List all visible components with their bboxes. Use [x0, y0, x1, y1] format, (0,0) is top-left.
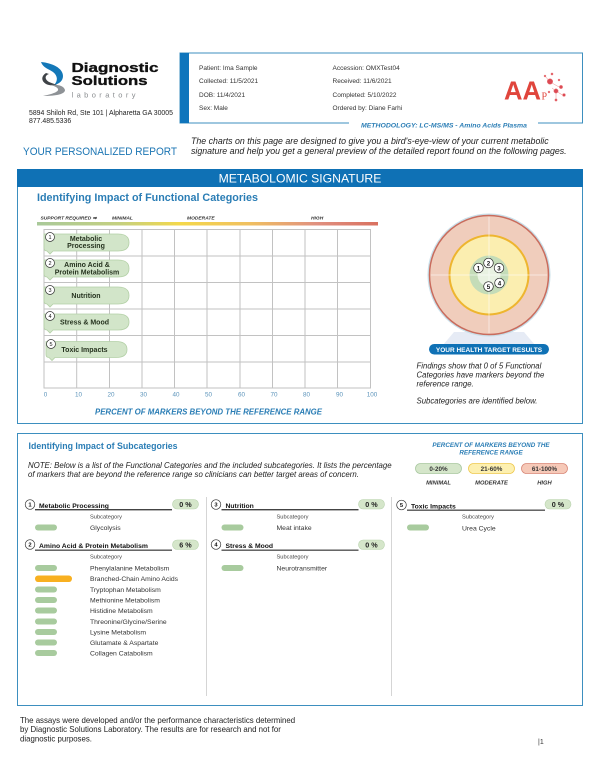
section: toxic impacts: Toxic Impacts [411, 504, 456, 510]
legend: moderate [468, 464, 514, 486]
category: amino acid and protein metabolism: Protein Metabolism [55, 270, 119, 276]
severity scale: HIGH [311, 216, 324, 222]
section: nutrition: 0 % [365, 500, 378, 509]
icon: AAP logo [504, 73, 566, 106]
severity scale: MODERATE [187, 216, 215, 222]
patient details: Sex: Male [199, 105, 228, 112]
findings text: Findings show that 0 of 5 Functional [416, 362, 542, 370]
note text: NOTE: Below is a list of the Functional Categories and the included subcategories. It lists the percentage [28, 461, 392, 470]
marker 2: 2 [487, 260, 491, 267]
section: amino acid and protein metabolism: 6 % [179, 540, 192, 550]
legend: high: 61-100% [532, 466, 557, 473]
section: metabolic processing: Glycolysis [90, 525, 121, 532]
icon: logo swirl [41, 62, 65, 96]
section: nutrition: 3 [214, 503, 218, 509]
axis labels: 0 [44, 392, 48, 398]
section: toxic impacts: Subcategory [462, 514, 494, 520]
heading bar: metabolomic signature [17, 169, 583, 187]
address: 877.485.5336 [29, 118, 71, 125]
section: stress and mood: 4 [214, 543, 218, 549]
accession details: Received: 11/6/2021 [332, 78, 392, 85]
panel: subcategories [18, 434, 582, 706]
target chart [428, 214, 550, 345]
bar chart: functional categories [44, 230, 378, 416]
axis labels: 80 [303, 392, 310, 398]
category: stress and mood: Stress & Mood [60, 320, 109, 326]
label: your health target results: YOUR HEALTH TARGET RESULTS [436, 347, 543, 354]
category: metabolic processing: Metabolic [70, 236, 102, 243]
severity scale [37, 216, 378, 226]
section: nutrition: Subcategory [276, 514, 309, 520]
marker 3: 3 [497, 265, 501, 272]
section: amino acid and protein metabolism: 2 [28, 543, 32, 549]
legend: high [522, 464, 568, 486]
section: metabolic processing [25, 500, 199, 532]
section: amino acid and protein metabolism: Collagen Catabolism [90, 650, 153, 658]
panel: metabolomic signature [17, 169, 583, 424]
patient details: DOB: 11/4/2021 [199, 92, 246, 99]
patient details: Patient: Ima Sample [199, 65, 258, 72]
findings text: Categories have markers beyond the [416, 370, 545, 380]
patient details: Collected: 11/5/2021 [199, 78, 259, 85]
category: metabolic processing: 1 [48, 235, 52, 241]
category: toxic impacts [46, 340, 127, 360]
category: nutrition [44, 286, 129, 307]
label: your health target results [429, 344, 549, 354]
heading bar: metabolomic signature: METABOLOMIC SIGNATURE [219, 172, 381, 186]
section: amino acid and protein metabolism: Lysine Metabolism [90, 630, 146, 636]
category: toxic impacts: 5 [49, 342, 53, 348]
subcategory rows [35, 565, 72, 656]
section: stress and mood [211, 540, 384, 572]
axis title: PERCENT OF MARKERS BEYOND THE REFERENCE RANGE [95, 408, 323, 416]
legend title: REFERENCE RANGE [459, 450, 523, 456]
moderate ring [450, 236, 528, 314]
legend [416, 442, 568, 486]
disclaimer: diagnostic purposes. [20, 734, 92, 744]
axis labels: 40 [172, 392, 180, 398]
section: amino acid and protein metabolism: Histidine Metabolism [90, 608, 153, 615]
findings text: Subcategories are identified below. [416, 396, 537, 406]
section: amino acid and protein metabolism: Methionine Metabolism [90, 598, 160, 604]
logo: Diagnostic Solutions Laboratory: laboratory [72, 90, 136, 100]
accession details: Ordered by: Diane Farhi [332, 105, 402, 112]
section: metabolic processing: 0 % [179, 500, 192, 509]
chart grid [44, 230, 370, 388]
section: amino acid and protein metabolism: Subcategory [90, 554, 122, 560]
section: amino acid and protein metabolism: Glutamate & Aspartate [90, 640, 159, 647]
disclaimer: The assays were developed and/or the performance characteristics determined [20, 716, 295, 725]
marker 5: 5 [487, 284, 491, 291]
outer ring [428, 214, 550, 336]
axis labels: 70 [270, 392, 278, 398]
category: amino acid and protein metabolism: 2 [48, 261, 52, 267]
icon: AAP logo: P [542, 92, 548, 102]
intro text: The charts on this page are designed to give you a bird's-eye-view of your current metabolic [191, 136, 549, 146]
section: nutrition: Nutrition [226, 503, 254, 510]
axis labels: 50 [205, 392, 212, 398]
category: nutrition: Nutrition [71, 293, 101, 300]
axis labels: 10 [75, 392, 82, 398]
section: stress and mood: Neurotransmitter [276, 566, 328, 572]
axis labels: 30 [140, 392, 147, 398]
section: amino acid and protein metabolism: Threonine/Glycine/Serine [90, 619, 167, 626]
note text: of markers that are beyond the reference range so clinicians can better target areas of concern. [28, 470, 359, 479]
intro text: signature and help you get a general preview of the detailed report found on the following pages. [191, 146, 567, 156]
accession details: Completed: 5/10/2022 [332, 92, 397, 99]
legend: high: HIGH [537, 480, 553, 486]
section: nutrition [211, 500, 384, 532]
section: toxic impacts: Urea Cycle [462, 526, 496, 532]
panel: patient information [180, 53, 582, 123]
heading: subcategories: Identifying Impact of Subcategories [28, 441, 178, 451]
findings text: reference range. [416, 380, 474, 388]
category: metabolic processing: Processing [67, 243, 105, 250]
marker 4: 4 [498, 280, 502, 287]
logo: Diagnostic Solutions Laboratory: Diagnostic [72, 60, 158, 75]
methodology label: METHODOLOGY: LC-MS/MS - Amino Acids Plasma [361, 122, 527, 130]
marker 1: 1 [477, 265, 481, 272]
section: toxic impacts: 5 [400, 503, 404, 509]
legend: moderate: MODERATE [475, 480, 509, 486]
disclaimer: by Diagnostic Solutions Laboratory. The results are for research and not for [20, 725, 281, 734]
category: metabolic processing [44, 232, 129, 254]
page number: |1 [538, 739, 544, 746]
section: stress and mood: 0 % [365, 540, 378, 550]
heading: your personalized report: YOUR PERSONALIZED REPORT [23, 146, 177, 158]
section: toxic impacts: 0 % [552, 500, 565, 509]
icon: AAP logo: AA [504, 76, 541, 106]
section: nutrition: Meat intake [276, 525, 312, 532]
category: amino acid and protein metabolism [44, 258, 129, 280]
heading: functional categories: Identifying Impact of Functional Categories [37, 192, 258, 204]
accession details [332, 65, 402, 112]
legend: moderate: 21-60% [481, 466, 503, 473]
axis labels [44, 392, 378, 398]
section: stress and mood: Stress & Mood [226, 543, 273, 550]
severity scale: SUPPORT REQUIRED ➡ [40, 216, 98, 222]
category: toxic impacts: Toxic Impacts [61, 347, 108, 354]
minimal zone [470, 256, 508, 294]
section: toxic impacts [397, 500, 571, 532]
section: amino acid and protein metabolism: Phenylalanine Metabolism [90, 566, 170, 572]
axis labels: 60 [238, 392, 245, 398]
category: amino acid and protein metabolism: Amino Acid & [64, 262, 110, 269]
legend: minimal [416, 464, 462, 486]
section: amino acid and protein metabolism: Branched-Chain Amino Acids [90, 576, 179, 583]
patient details [199, 65, 259, 112]
category: nutrition: 3 [48, 288, 52, 294]
section: amino acid and protein metabolism [25, 540, 199, 658]
accent bar [180, 53, 189, 123]
section: stress and mood: Subcategory [276, 554, 309, 560]
logo: Diagnostic Solutions Laboratory [41, 60, 158, 100]
section: amino acid and protein metabolism: Amino Acid & Protein Metabolism [39, 543, 148, 550]
axis labels: 90 [336, 392, 343, 398]
legend title: PERCENT OF MARKERS BEYOND THE [432, 442, 550, 449]
address: 5894 Shiloh Rd, Ste 101 | Alpharetta GA 30005 [29, 110, 173, 117]
section: metabolic processing: Metabolic Processing [39, 503, 109, 510]
legend: minimal: MINIMAL [426, 480, 451, 486]
severity scale: MINIMAL [112, 216, 133, 222]
section: metabolic processing: 1 [28, 503, 32, 509]
section: metabolic processing: Subcategory [90, 514, 122, 520]
axis labels: 100 [367, 392, 378, 398]
logo: Diagnostic Solutions Laboratory: Solutions [72, 73, 148, 88]
target base [443, 332, 535, 345]
axis labels: 20 [107, 392, 115, 398]
category: stress and mood: 4 [48, 314, 52, 320]
section: amino acid and protein metabolism: Tryptophan Metabolism [90, 587, 161, 594]
accession details: Accession: OMXTest04 [332, 65, 400, 72]
legend: minimal: 0-20% [429, 466, 448, 473]
category: stress and mood [44, 312, 129, 333]
